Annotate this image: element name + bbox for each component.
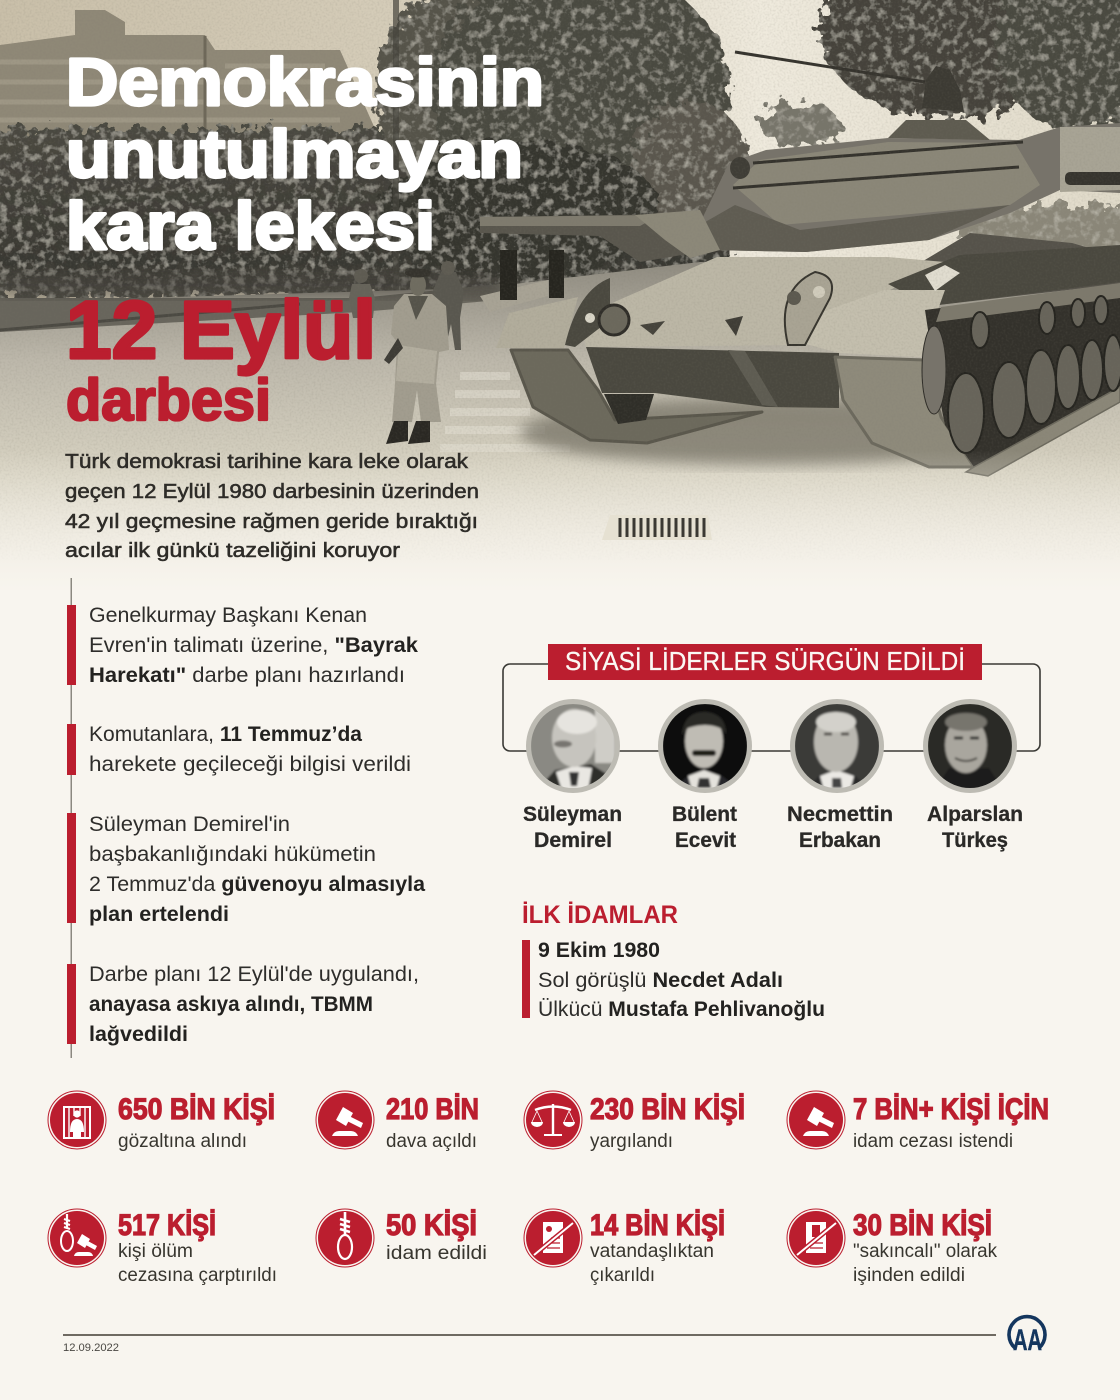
stat: 30 bin işten: "sakıncalı" olarak	[853, 1241, 997, 1262]
stat: 7 bin+ idam cezası	[787, 1091, 1049, 1152]
stat: 210 bin dava: dava açıldı	[386, 1131, 477, 1152]
road wheels	[948, 296, 1120, 453]
intro paragraph: geçen 12 Eylül 1980 darbesinin üzerinden	[65, 481, 479, 503]
stat: 230 bin yargılandı: yargılandı	[590, 1131, 673, 1152]
date: 12.09.2022	[63, 1342, 119, 1354]
leader names: Ecevit	[675, 829, 736, 852]
icon: noose	[316, 1209, 374, 1267]
left fender	[496, 297, 578, 348]
stat: 50 idam	[316, 1209, 487, 1267]
event: 12 Eylül uygulandı	[67, 963, 419, 1046]
icon: noose and gavel	[48, 1209, 106, 1267]
leader names	[523, 803, 1023, 852]
panel: first executions: İLK İDAMLAR	[522, 901, 678, 929]
right fender	[802, 290, 945, 357]
title	[66, 45, 544, 264]
event: 12 Eylül uygulandı: Darbe planı 12 Eylül'de uygulandı,	[89, 963, 419, 986]
stat: 14 bin vatandaşlık: vatandaşlıktan	[590, 1241, 714, 1262]
stat: 7 bin+ idam cezası: 7 BİN+ KİŞİ İÇİN	[853, 1093, 1049, 1126]
stat: 14 bin vatandaşlık	[524, 1209, 725, 1286]
hull front plate	[586, 347, 839, 408]
stat: 517 ölüm cezası: cezasına çarptırıldı	[118, 1265, 277, 1286]
rear hull	[888, 233, 1120, 306]
stat: 14 bin vatandaşlık: 14 BİN KİŞİ	[590, 1209, 725, 1242]
leader names: Alparslan	[927, 803, 1023, 826]
stat: 650 bin gözaltı: 650 BİN KİŞİ	[118, 1093, 275, 1126]
event: 12 Eylül uygulandı: lağvedildi	[89, 1023, 188, 1046]
banner heading: SİYASİ LİDERLER SÜRGÜN EDİLDİ	[565, 646, 965, 676]
trees	[0, 0, 1120, 298]
panel: first executions: 9 Ekim 1980	[538, 939, 660, 962]
timeline of events	[67, 578, 425, 1058]
leader names: Erbakan	[799, 829, 881, 852]
headlights	[785, 272, 832, 345]
event: 11 Temmuz	[67, 723, 411, 776]
event: Bayrak Harekatı: Harekatı" darbe planı hazırlandı	[89, 664, 405, 687]
intro paragraph: 42 yıl geçmesine rağmen geride bıraktığı	[65, 511, 478, 533]
panel: first executions	[522, 901, 825, 1021]
event: Bayrak Harekatı: Genelkurmay Başkanı Kenan	[89, 604, 367, 627]
icon: gavel	[316, 1091, 374, 1149]
utility pole	[393, 0, 399, 300]
icon: gavel	[787, 1091, 845, 1149]
portrait: Alparslan Türkeş	[923, 699, 1017, 793]
tank shadow on road	[520, 398, 1020, 466]
event: 11 Temmuz: harekete geçileceği bilgisi verildi	[89, 753, 411, 776]
stat: 517 ölüm cezası	[48, 1209, 277, 1286]
stat: 14 bin vatandaşlık: çıkarıldı	[590, 1265, 655, 1286]
event: 12 Eylül uygulandı: anayasa askıya alındı, TBMM	[89, 993, 373, 1016]
stat: 50 idam: 50 KİŞİ	[386, 1209, 477, 1242]
event: plan ertelendi: Süleyman Demirel'in	[89, 813, 290, 836]
portrait: Bülent Ecevit	[658, 699, 752, 793]
building	[0, 10, 380, 140]
footer rule	[63, 1334, 996, 1336]
event: Bayrak Harekatı	[67, 604, 418, 687]
stat: 230 bin yargılandı	[524, 1091, 745, 1152]
subtitle: 12 Eylül darbesi	[66, 285, 376, 433]
event: plan ertelendi: başbakanlığındaki hükümetin	[89, 843, 376, 866]
stat: 650 bin gözaltı	[48, 1091, 275, 1152]
panel: first executions: Sol görüşlü Necdet Adalı	[538, 969, 783, 992]
intro paragraph: Türk demokrasi tarihine kara leke olarak	[65, 451, 469, 473]
panel: exiled political leaders	[503, 644, 1040, 852]
stat: 210 bin dava	[316, 1091, 479, 1152]
icon: crossed work document	[787, 1209, 845, 1267]
icon: crossed citizenship document	[524, 1209, 582, 1267]
event: 11 Temmuz: Komutanlara, 11 Temmuz’da	[89, 723, 362, 746]
subtitle: 12 Eylül darbesi: 12 Eylül	[66, 285, 376, 376]
suspension	[925, 284, 1120, 467]
icon: AA logo	[1009, 1317, 1045, 1357]
stat: 30 bin işten: 30 BİN KİŞİ	[853, 1209, 992, 1242]
subtitle: 12 Eylül darbesi: darbesi	[66, 368, 271, 433]
foreground soldier	[384, 268, 449, 444]
crosswalk stripes	[440, 376, 570, 448]
front right track	[835, 357, 974, 467]
hero photo: tank and soldiers in the street	[0, 0, 1120, 600]
stat: 230 bin yargılandı: 230 BİN KİŞİ	[590, 1093, 745, 1126]
stat: 650 bin gözaltı: gözaltına alındı	[118, 1131, 247, 1152]
portrait: Süleyman Demirel	[526, 699, 620, 793]
roof machine gun and gunner	[735, 52, 925, 82]
leader names: Demirel	[534, 829, 612, 852]
fade to page	[0, 450, 1120, 600]
stat: 50 idam: idam edildi	[386, 1243, 487, 1264]
intro paragraph	[65, 451, 479, 562]
title: unutulmayan	[66, 117, 523, 192]
icon: scales	[524, 1091, 582, 1149]
stat: 210 bin dava: 210 BİN	[386, 1093, 479, 1126]
stat: 517 ölüm cezası: 517 KİŞİ	[118, 1209, 216, 1242]
event: plan ertelendi: 2 Temmuz'da güvenoyu almasıyla	[89, 873, 425, 896]
street surface	[0, 262, 1120, 590]
tank	[480, 52, 1120, 476]
turret	[700, 123, 1120, 252]
drain grate	[602, 515, 712, 540]
hull deck	[578, 257, 945, 347]
left track	[511, 350, 762, 443]
panel: first executions: Ülkücü Mustafa Pehlivanoğlu	[538, 998, 825, 1021]
grain	[0, 0, 1120, 560]
background soldiers	[349, 261, 464, 350]
leader names: Necmettin	[787, 803, 893, 826]
stat: 30 bin işten	[787, 1209, 997, 1286]
leader names: Süleyman	[523, 803, 622, 826]
title: kara lekesi	[66, 189, 435, 264]
gun barrel	[480, 214, 712, 262]
event: plan ertelendi: plan ertelendi	[89, 903, 229, 926]
stat: 7 bin+ idam cezası: idam cezası istendi	[853, 1131, 1013, 1152]
event: plan ertelendi	[67, 813, 425, 926]
icon: prison bars	[48, 1091, 106, 1149]
leader names: Türkeş	[942, 829, 1008, 852]
leader names: Bülent	[672, 803, 737, 826]
intro paragraph: acılar ilk günkü tazeliğini koruyor	[65, 540, 400, 562]
stat: 30 bin işten: işinden edildi	[853, 1265, 965, 1286]
portrait: Necmettin Erbakan	[790, 699, 884, 793]
title: Demokrasinin	[66, 45, 544, 120]
event: Bayrak Harekatı: Evren'in talimatı üzerine, "Bayrak	[89, 634, 418, 657]
stat: 517 ölüm cezası: kişi ölüm	[118, 1241, 193, 1262]
icon: AA logo: AA	[1013, 1324, 1042, 1357]
